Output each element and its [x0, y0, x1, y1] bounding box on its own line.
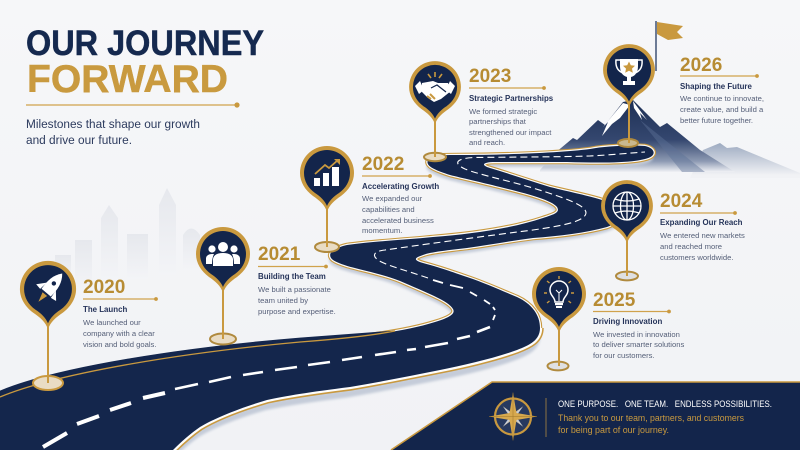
road top gold line — [0, 331, 395, 397]
flag — [655, 21, 683, 71]
text: 2025 — [593, 290, 684, 360]
text: 2024: We entered new markets — [660, 231, 745, 240]
text: 2025: We invested in innovation — [593, 330, 680, 339]
title: OUR JOURNEY — [26, 23, 264, 63]
lane dashes — [43, 393, 165, 447]
text: 2023: strengthened our impact — [469, 128, 552, 137]
text: 2022 — [362, 154, 439, 235]
text: 2023: 2023 — [469, 66, 511, 87]
text: 2020: company with a clear — [83, 329, 155, 338]
text: 2022: Accelerating Growth — [362, 182, 439, 191]
text: 2021: team united by — [258, 296, 308, 305]
icon: rocket — [28, 265, 72, 310]
text: 2022: accelerated business — [362, 216, 434, 225]
mountains — [540, 100, 800, 178]
text: 2020: We launched our — [83, 318, 141, 327]
text: 2026: 2026 — [680, 55, 722, 76]
text: 2023: partnerships that — [469, 117, 527, 126]
text: 2022: 2022 — [362, 154, 404, 175]
text: 2023 — [469, 66, 554, 147]
text: 2024 — [660, 191, 745, 262]
text: 2020: The Launch — [83, 305, 127, 314]
text: 2026: better future together. — [680, 116, 753, 125]
text: 2022: capabilities and — [362, 205, 415, 214]
pin 2026: trophy — [603, 44, 655, 147]
icon: chart — [314, 159, 340, 186]
text: 2026: We continue to innovate, — [680, 94, 764, 103]
title rule — [26, 102, 240, 108]
icon: globe — [613, 192, 641, 220]
text: 2021 — [258, 244, 336, 316]
text: 2020: vision and bold goals. — [83, 340, 156, 349]
banner text: Thank you to our team, partners, and customers — [558, 413, 744, 423]
text: 2020: 2020 — [83, 277, 125, 298]
text: 2023: and reach. — [469, 138, 505, 147]
skyline silhouette — [55, 188, 200, 290]
text: 2023: Strategic Partnerships — [469, 94, 554, 103]
icon: handshake — [415, 72, 455, 102]
subtitle: and drive our future. — [26, 133, 132, 147]
pin 2024: globe — [601, 180, 653, 280]
text: 2021: Building the Team — [258, 272, 326, 281]
text: 2024: 2024 — [660, 191, 703, 212]
text: 2024: and reached more — [660, 242, 722, 251]
title — [26, 23, 264, 101]
banner text: for being part of our journey. — [558, 425, 669, 435]
pin 2025: light bulb — [532, 267, 586, 370]
text: 2025: Driving Innovation — [593, 317, 662, 326]
winding road — [0, 146, 654, 450]
title: FORWARD — [27, 58, 228, 101]
subtitle: Milestones that shape our growth — [26, 117, 200, 131]
text: 2021: purpose and expertise. — [258, 307, 336, 316]
banner text: ONE PURPOSE. ONE TEAM. ENDLESS POSSIBILITIES. — [558, 399, 772, 409]
text: 2026 — [680, 55, 764, 125]
pin 2021: team — [196, 227, 250, 344]
icon: trophy — [616, 59, 642, 85]
pin 2022: growth chart — [300, 146, 354, 252]
road top dark edge — [0, 331, 395, 397]
text: 2024: Expanding Our Reach — [660, 218, 743, 227]
text: 2024: customers worldwide. — [660, 253, 733, 262]
text: 2026: create value, and build a — [680, 105, 764, 114]
text: 2025: to deliver smarter solutions — [593, 340, 684, 349]
text: 2022: momentum. — [362, 226, 402, 235]
bottom banner — [391, 382, 800, 450]
text: 2020 — [83, 277, 158, 349]
text: 2021: 2021 — [258, 244, 301, 265]
text: 2025: 2025 — [593, 290, 636, 311]
text: 2023: We formed strategic — [469, 107, 537, 116]
text: 2021: We built a passionate — [258, 285, 331, 294]
pin 2020: rocket — [20, 261, 76, 390]
icon: people — [206, 242, 240, 266]
icon: compass — [489, 392, 537, 440]
banner text — [558, 399, 772, 435]
text: 2022: We expanded our — [362, 194, 423, 203]
icon: bulb — [544, 276, 574, 308]
text: 2026: Shaping the Future — [680, 82, 753, 91]
pin 2023: handshake — [409, 61, 461, 161]
text: 2025: for our customers. — [593, 351, 655, 360]
subtitle — [26, 117, 200, 147]
